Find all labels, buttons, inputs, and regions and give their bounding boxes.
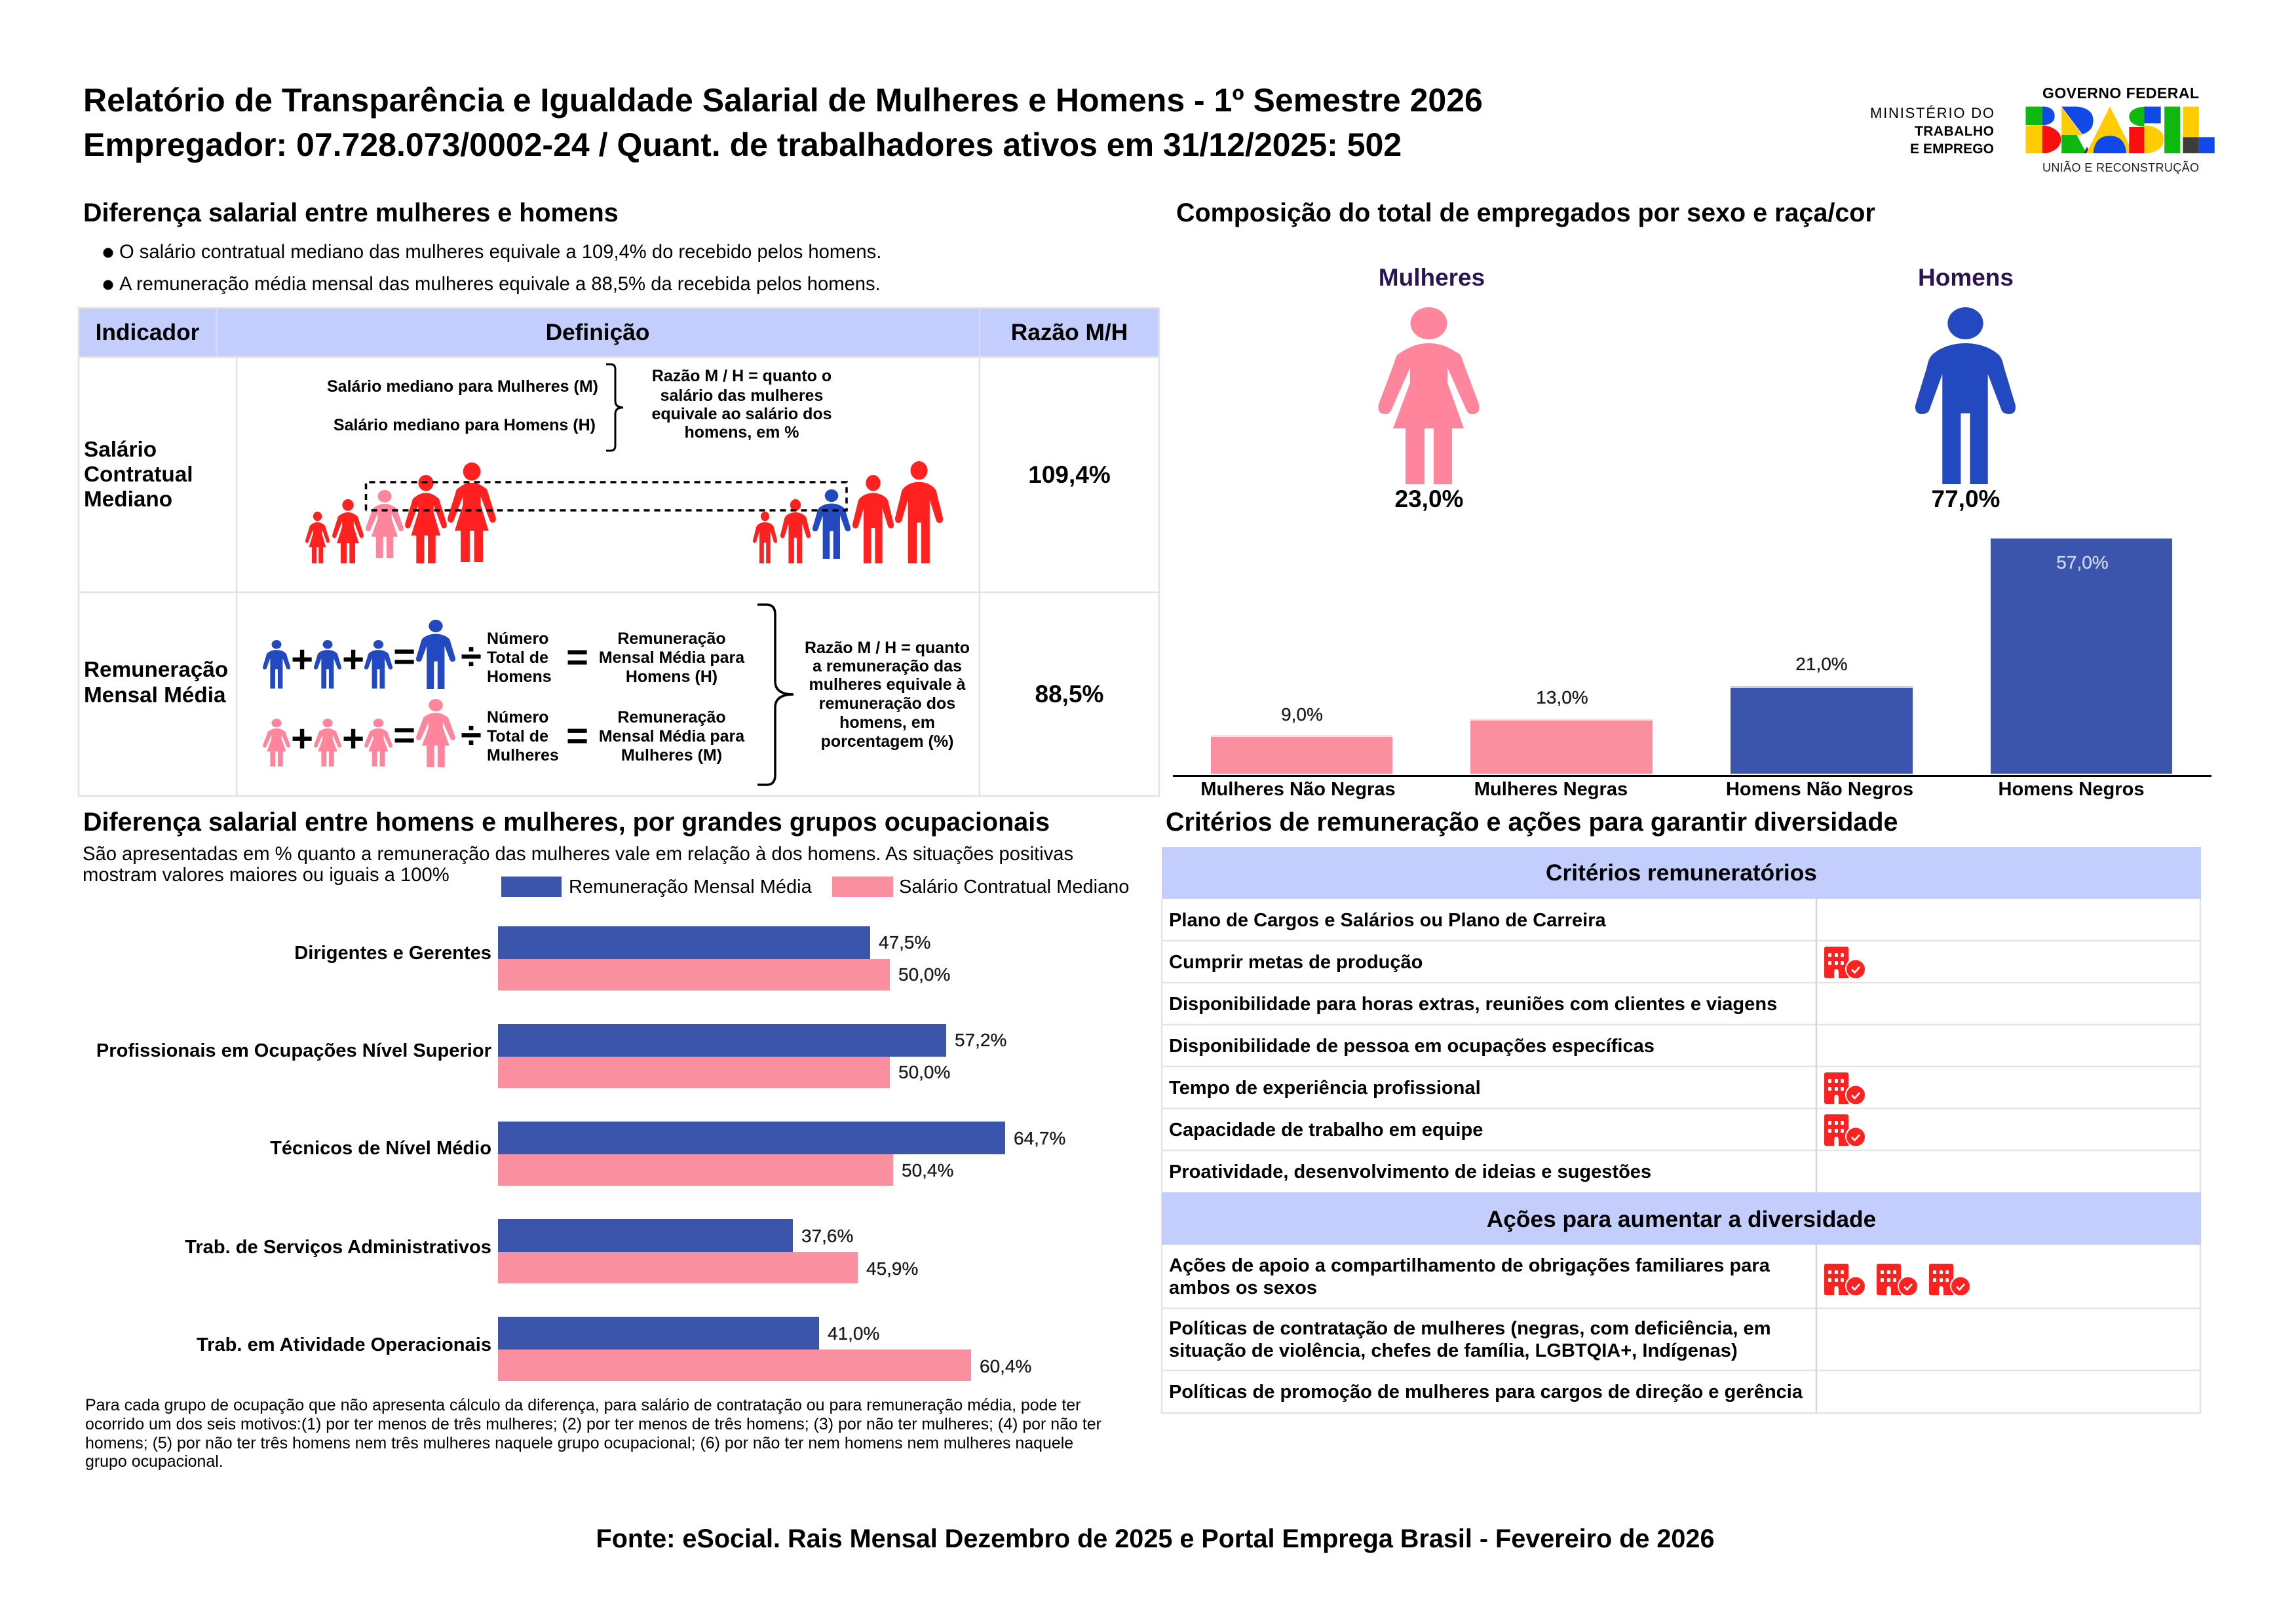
icon: building check — [1824, 1072, 1866, 1105]
icon: woman — [1378, 307, 1480, 484]
equation: women: Total de — [487, 727, 548, 746]
group: profissionais: 57,2% — [955, 1030, 1006, 1050]
icon: men ordered by salary — [753, 461, 943, 563]
definition: salário mediano — [327, 377, 598, 434]
rows: ações: situação de violência, chefes de família, LGBTQIA+, Indígenas) — [1169, 1340, 1738, 1361]
group: profissionais: 50,0% — [898, 1062, 950, 1082]
panel: homens: 77,0% — [1932, 485, 2000, 512]
equation: men — [263, 620, 745, 689]
table header: Definição — [546, 320, 649, 345]
title: Empregador: 07.728.073/0002-24 / Quant. de trabalhadores ativos em 31/12/2025: 502 — [83, 126, 1402, 163]
description: mostram valores maiores ou iguais a 100% — [83, 865, 450, 886]
equation: men: + — [342, 638, 364, 681]
legend: Salário Contratual Mediano — [899, 877, 1129, 897]
equation: men: Homens — [487, 668, 552, 686]
heading: grupos ocupacionais: Diferença salarial entre homens e mulheres, por grandes grupos ocupacionais — [83, 808, 1050, 837]
legend: Remuneração Mensal Média — [569, 877, 813, 897]
logo: ministério do trabalho e emprego — [1870, 105, 1994, 157]
panel: mulheres: Mulheres — [1379, 264, 1485, 291]
icon: building check — [1824, 1114, 1866, 1147]
bar chart: composition: Homens Negros — [1998, 779, 2145, 800]
dashed median box — [366, 482, 847, 510]
group: serviços administrativos: 37,6% — [801, 1226, 853, 1246]
header: ações — [1162, 1192, 2201, 1245]
rows: critérios: Tempo de experiência profissional — [1169, 1078, 1481, 1099]
definition: razão M/H remuneração: homens, em — [839, 713, 935, 732]
bar chart: composition: Mulheres Negras — [1474, 779, 1628, 800]
heading: composição: Composição do total de empregados por sexo e raça/cor — [1176, 198, 1875, 227]
table header: Indicador — [96, 320, 200, 345]
equation: women — [263, 699, 745, 767]
group: serviços administrativos — [185, 1219, 918, 1283]
description: São apresentadas em % quanto a remuneração das mulheres vale em relação à dos homens. As situações positivas — [83, 844, 1073, 865]
footnote: ocorrido um dos seis motivos:(1) por ter menos de três mulheres; (2) por ter menos de três homens; (3) por não ter mulheres; (4) por não ter — [85, 1415, 1101, 1433]
legend — [501, 877, 1129, 897]
header: ações: Ações para aumentar a diversidade — [1487, 1207, 1876, 1232]
icon: women ordered by salary — [305, 463, 496, 563]
equation: men: Número — [487, 630, 548, 648]
rows: ações: Políticas de contratação de mulheres (negras, com deficiência, em — [1169, 1318, 1771, 1339]
logo: ministério do trabalho e emprego: MINISTÉRIO DO — [1870, 105, 1994, 121]
group: profissionais: Profissionais em Ocupações Nível Superior — [96, 1040, 491, 1061]
value: 88,5%: 88,5% — [1035, 681, 1103, 708]
equation: women: Mulheres — [487, 746, 559, 765]
equation: women: Número — [487, 708, 548, 727]
group: dirigentes: Dirigentes e Gerentes — [294, 943, 491, 964]
equation: men: = — [566, 636, 588, 679]
row label: remuneração mensal média — [84, 658, 228, 708]
rows: ações: Políticas de promoção de mulheres para cargos de direção e gerência — [1169, 1382, 1803, 1403]
equation: men: Total de — [487, 649, 548, 667]
equation: women: = — [393, 714, 415, 757]
rows: critérios: Proatividade, desenvolvimento de ideias e sugestões — [1169, 1161, 1651, 1182]
definition: razão M/H remuneração: Razão M / H = quanto — [805, 639, 970, 657]
table header — [79, 308, 1159, 356]
panel: indicator table — [79, 308, 1159, 796]
group: técnicos: 50,4% — [902, 1160, 953, 1180]
footnote: Para cada grupo de ocupação que não apresenta cálculo da diferença, para salário de contratação ou para remuneração média, pode ter — [85, 1396, 1081, 1414]
panel: mulheres — [1378, 264, 1485, 512]
group: atividade operacional: 41,0% — [828, 1323, 879, 1344]
large brace — [757, 605, 794, 785]
bullet list: A remuneração média mensal das mulheres equivale a 88,5% da recebida pelos homens. — [119, 274, 881, 295]
definition: razão M/H remuneração: porcentagem (%) — [821, 732, 953, 751]
bar chart: composition: Mulheres Não Negras — [1200, 779, 1396, 800]
definition: razão M/H salário: salário das mulheres — [660, 387, 823, 405]
definition: razão M/H remuneração: mulheres equivale à — [809, 675, 966, 694]
rows: critérios: Cumprir metas de produção — [1169, 952, 1423, 973]
equation: women: Mulheres (M) — [621, 746, 722, 765]
panel: mulheres: 23,0% — [1395, 485, 1463, 512]
bar chart: composition: Homens Não Negros — [1726, 779, 1913, 800]
definition: salário mediano: Salário mediano para Homens (H) — [334, 416, 596, 434]
panel: homens: Homens — [1918, 264, 2014, 291]
definition: razão M/H salário — [651, 367, 832, 442]
group: serviços administrativos: Trab. de Serviços Administrativos — [185, 1237, 491, 1258]
rows: critérios — [1169, 910, 1777, 1182]
rows: critérios: Capacidade de trabalho em equipe — [1169, 1120, 1483, 1141]
brace — [606, 364, 623, 451]
header: critérios remuneratórios — [1162, 847, 2201, 899]
definition: salário mediano: Salário mediano para Mulheres (M) — [327, 377, 598, 396]
logo: governo federal brasil: UNIÃO E RECONSTRUÇÃO — [2042, 161, 2199, 174]
rows: critérios: Disponibilidade de pessoa em ocupações específicas — [1169, 1036, 1655, 1057]
value: 109,4%: 109,4% — [1028, 461, 1111, 488]
group: atividade operacional: 60,4% — [980, 1356, 1031, 1376]
icon: man — [1915, 307, 2016, 484]
source: Fonte: eSocial. Rais Mensal Dezembro de 2025 e Portal Emprega Brasil - Fevereiro de 2026 — [596, 1524, 1714, 1553]
equation: women: + — [291, 717, 313, 760]
row label: remuneração mensal média: Remuneração — [84, 658, 228, 682]
group: técnicos — [270, 1122, 1065, 1186]
equation: women: Remuneração — [617, 708, 726, 727]
equation: women: Mensal Média para — [599, 727, 745, 746]
bar chart: composition: 21,0% — [1795, 654, 1848, 674]
title — [83, 82, 1483, 163]
icon: building check — [1824, 947, 1866, 979]
definition: razão M/H salário: equivale ao salário dos — [651, 405, 832, 423]
equation: men: Homens (H) — [626, 668, 718, 686]
group: técnicos: 64,7% — [1014, 1128, 1065, 1148]
rows: ações: ambos os sexos — [1169, 1277, 1317, 1298]
logo: governo federal brasil — [2025, 85, 2215, 174]
rows: critérios: Plano de Cargos e Salários ou Plano de Carreira — [1169, 910, 1607, 931]
group: dirigentes — [294, 926, 950, 991]
group: profissionais — [96, 1024, 1006, 1088]
description — [83, 844, 1073, 886]
bar chart: occupational groups — [96, 926, 1065, 1381]
group: atividade operacional: Trab. em Atividade Operacionais — [197, 1334, 491, 1355]
title: Relatório de Transparência e Igualdade Salarial de Mulheres e Homens - 1º Semestre 2026 — [83, 82, 1483, 119]
rows: ações — [1169, 1255, 1803, 1403]
group: técnicos: Técnicos de Nível Médio — [270, 1138, 491, 1159]
row label: salário contratual mediano — [84, 438, 193, 512]
equation: men: Remuneração — [617, 630, 726, 648]
equation: women: + — [342, 717, 364, 760]
rows: critérios: Disponibilidade para horas extras, reuniões com clientes e viagens — [1169, 994, 1777, 1015]
bullet list — [104, 242, 881, 295]
equation: men: ÷ — [461, 635, 482, 678]
table header: Razão M/H — [1011, 320, 1128, 345]
panel: criteria table — [1162, 847, 2201, 1413]
bar chart: composition: 13,0% — [1536, 687, 1588, 708]
definition: razão M/H salário: homens, em % — [684, 423, 799, 442]
bar chart: composition: 57,0% — [2056, 552, 2109, 573]
footnote: grupo ocupacional. — [85, 1452, 223, 1471]
icons: three building checks — [1824, 1264, 1971, 1296]
rows: ações: Ações de apoio a compartilhamento de obrigações familiares para — [1169, 1255, 1770, 1276]
logo: ministério do trabalho e emprego: TRABALHO — [1915, 124, 1994, 139]
footnote — [85, 1396, 1101, 1471]
heading: critérios: Critérios de remuneração e ações para garantir diversidade — [1166, 808, 1898, 837]
equation: women: ÷ — [461, 714, 482, 757]
equation: men: Mensal Média para — [599, 649, 745, 667]
definition: razão M/H remuneração: a remuneração das — [813, 657, 962, 675]
row label: salário contratual mediano: Mediano — [84, 487, 172, 512]
equation: men: + — [291, 638, 313, 681]
header: critérios remuneratórios: Critérios remuneratórios — [1546, 860, 1817, 886]
logo: ministério do trabalho e emprego: E EMPREGO — [1910, 142, 1994, 157]
panel: homens — [1915, 264, 2016, 512]
group: serviços administrativos: 45,9% — [866, 1258, 918, 1279]
heading: diferença salarial: Diferença salarial entre mulheres e homens — [83, 198, 619, 227]
definition: razão M/H salário: Razão M / H = quanto o — [652, 367, 832, 385]
logo: governo federal brasil: GOVERNO FEDERAL — [2042, 85, 2199, 102]
equation: men: = — [393, 635, 415, 678]
definition: razão M/H remuneração — [805, 639, 970, 751]
bar chart: composition: 9,0% — [1281, 704, 1323, 725]
equation: women: = — [566, 715, 588, 757]
bar chart: composition — [1173, 538, 2211, 800]
bullet list: O salário contratual mediano das mulheres equivale a 109,4% do recebido pelos homens. — [119, 242, 881, 263]
row label: salário contratual mediano: Salário — [84, 438, 157, 462]
group: dirigentes: 47,5% — [879, 932, 930, 953]
row label: remuneração mensal média: Mensal Média — [84, 683, 226, 708]
row label: salário contratual mediano: Contratual — [84, 463, 193, 487]
group: dirigentes: 50,0% — [898, 964, 950, 985]
group: atividade operacional — [197, 1317, 1031, 1381]
footnote: homens; (5) por não ter três homens nem três mulheres naquele grupo ocupacional; (6) por não ter nem homens nem mulheres naquele — [85, 1434, 1073, 1452]
definition: razão M/H remuneração: remuneração dos — [819, 694, 955, 713]
